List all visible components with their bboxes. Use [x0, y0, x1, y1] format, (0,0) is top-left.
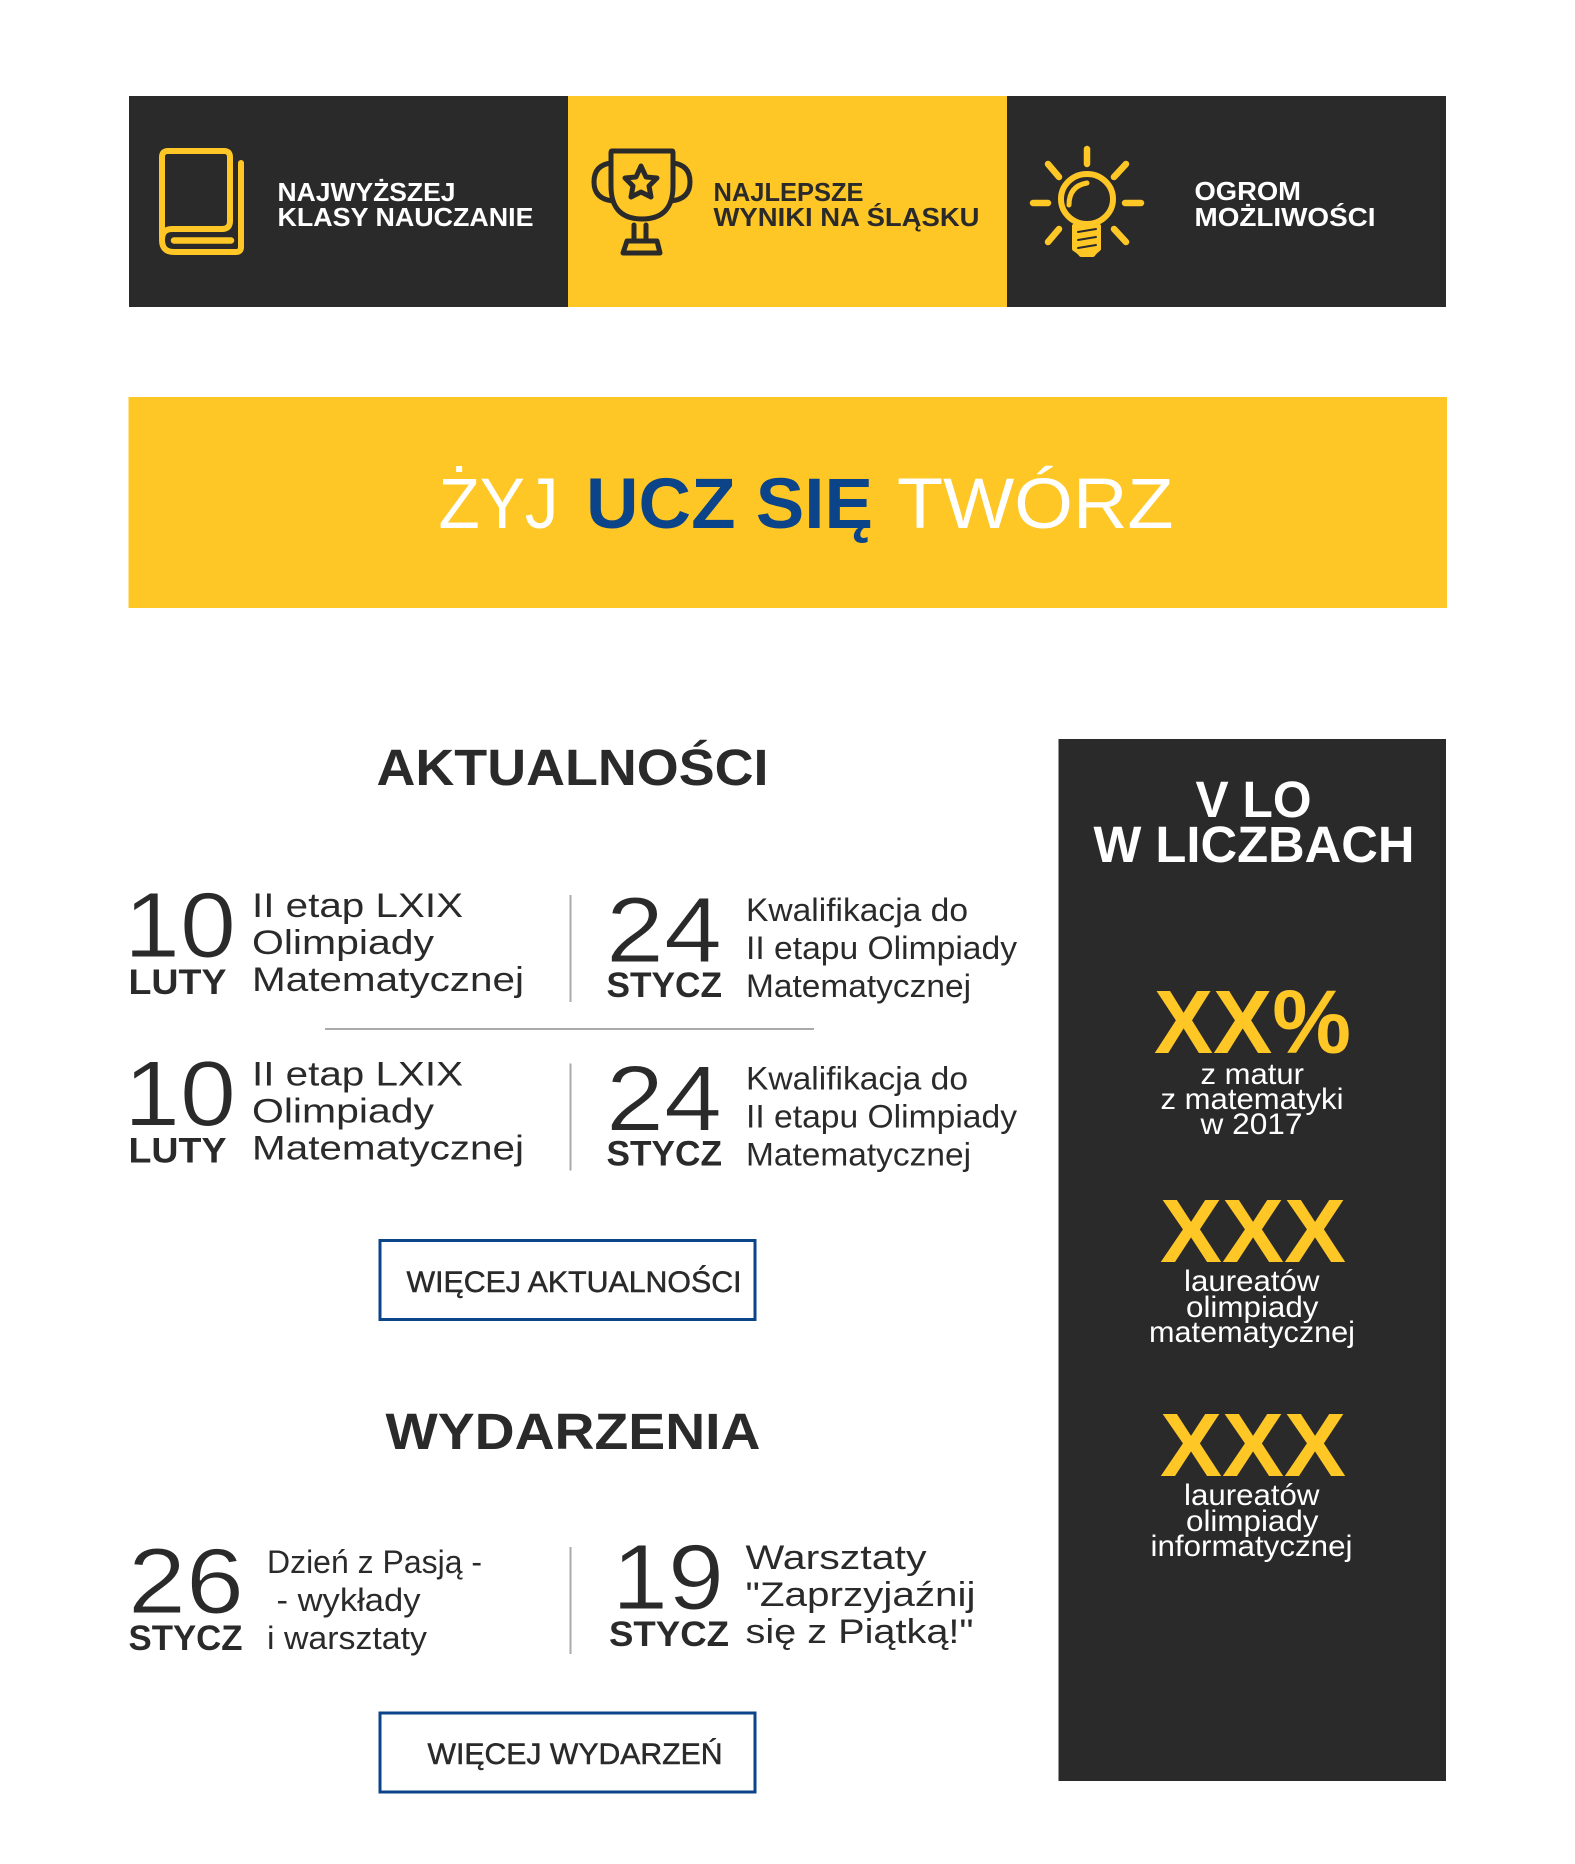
news item: 24 stycz: Kwalifikacja do: [746, 892, 968, 928]
button: więcej wydarzeń: [380, 1713, 755, 1792]
stat: laureaci olimpiady informatycznej: XXX: [1160, 1396, 1346, 1496]
event item: 19 stycz: STYCZ: [609, 1615, 729, 1654]
text: najwyższej klasy nauczanie: KLASY NAUCZANIE: [278, 202, 534, 232]
panel: v lo w liczbach: [1058, 739, 1446, 1781]
news item: 24 stycz, second row: II etapu Olimpiady: [746, 1098, 1017, 1134]
heading: slogan: TWÓRZ: [897, 465, 1174, 544]
icon: book: [162, 151, 241, 252]
news item: 24 stycz: [606, 878, 1017, 1005]
text: najwyższej klasy nauczanie: [278, 177, 534, 232]
news item: 10 luty, second row: 10: [124, 1042, 236, 1146]
heading: slogan: [438, 465, 1174, 544]
news item: 24 stycz, second row: Kwalifikacja do: [746, 1060, 968, 1096]
stat: laureaci olimpiady matematycznej: [1149, 1182, 1355, 1349]
panel: aktualności: [124, 739, 1017, 1320]
event item: 26 stycz: i warsztaty: [267, 1620, 427, 1656]
stat: laureaci olimpiady matematycznej: olimpiady: [1186, 1291, 1318, 1324]
heading: aktualności: AKTUALNOŚCI: [376, 739, 768, 796]
news item: 10 luty: II etap LXIX: [252, 887, 463, 925]
stat: laureaci olimpiady informatycznej: laureatów: [1184, 1479, 1320, 1512]
news item: 10 luty, second row: LUTY: [128, 1132, 226, 1170]
text: najlepsze wyniki na śląsku: NAJLEPSZE: [714, 177, 864, 207]
event item: 19 stycz: Warsztaty: [746, 1539, 926, 1577]
event item: 19 stycz: [609, 1525, 976, 1654]
button: więcej aktualności: [380, 1240, 755, 1320]
heading: slogan: ŻYJ: [438, 465, 558, 544]
news item: 10 luty: [124, 873, 524, 1002]
news item: 10 luty: 10: [124, 873, 236, 977]
news item: 10 luty: Olimpiady: [252, 924, 434, 962]
event item: 26 stycz: [128, 1529, 482, 1658]
stat: laureaci olimpiady matematycznej: matematycznej: [1149, 1316, 1355, 1349]
stat: matury: XX%: [1154, 973, 1351, 1073]
news item: 24 stycz: Matematycznej: [746, 968, 971, 1004]
event item: 26 stycz: 26: [128, 1529, 244, 1633]
panel: top feature bar: [129, 96, 1446, 307]
news item: 24 stycz, second row: 24: [606, 1046, 722, 1150]
news item: 24 stycz: 24: [606, 878, 722, 982]
event item: 26 stycz: - wykłady: [276, 1582, 420, 1618]
text: ogrom możliwości: [1194, 176, 1376, 232]
event item: 19 stycz: się z Piątką!": [746, 1613, 974, 1651]
news item: 10 luty, second row: [124, 1042, 524, 1170]
stat: laureaci olimpiady informatycznej: olimpiady: [1186, 1505, 1318, 1538]
feature: ogrom możliwości: [1007, 96, 1446, 307]
stat: matury: z matur: [1200, 1058, 1304, 1091]
stat: laureaci olimpiady matematycznej: XXX: [1160, 1182, 1346, 1282]
news item: 24 stycz: II etapu Olimpiady: [746, 930, 1017, 966]
button: więcej aktualności: WIĘCEJ AKTUALNOŚCI: [406, 1265, 742, 1299]
text: najlepsze wyniki na śląsku: WYNIKI NA ŚLĄSKU: [714, 202, 980, 232]
icon: light bulb: [1033, 149, 1141, 255]
text: najlepsze wyniki na śląsku: [714, 177, 980, 232]
stat: matury: [1154, 973, 1351, 1141]
text: najwyższej klasy nauczanie: NAJWYŻSZEJ: [278, 177, 456, 207]
icon: trophy: [594, 151, 690, 253]
stat: laureaci olimpiady informatycznej: informatycznej: [1150, 1530, 1352, 1563]
stat: laureaci olimpiady informatycznej: [1150, 1396, 1352, 1563]
news item: 10 luty, second row: Olimpiady: [252, 1092, 434, 1130]
heading: v lo w liczbach: [1094, 771, 1414, 873]
news item: 24 stycz, second row: [606, 1046, 1017, 1174]
panel: slogan banner: [128, 397, 1447, 608]
event item: 26 stycz: Dzień z Pasją -: [267, 1544, 482, 1580]
heading: wydarzenia: WYDARZENIA: [386, 1403, 760, 1460]
event item: 19 stycz: 19: [612, 1525, 724, 1629]
news item: 24 stycz, second row: STYCZ: [606, 1134, 722, 1174]
text: ogrom możliwości: MOŻLIWOŚCI: [1194, 202, 1376, 232]
text: ogrom możliwości: OGROM: [1194, 176, 1301, 206]
news item: 10 luty: LUTY: [128, 963, 226, 1002]
event item: 26 stycz: STYCZ: [128, 1619, 242, 1658]
news item: 10 luty, second row: Matematycznej: [252, 1130, 524, 1168]
heading: slogan: UCZ SIĘ: [586, 465, 873, 544]
news item: 10 luty: Matematycznej: [252, 961, 524, 999]
stat: laureaci olimpiady matematycznej: laureatów: [1184, 1265, 1320, 1298]
heading: v lo w liczbach: W LICZBACH: [1094, 816, 1414, 873]
stat: matury: z matematyki: [1160, 1083, 1344, 1116]
heading: v lo w liczbach: V LO: [1196, 771, 1312, 828]
button: więcej wydarzeń: WIĘCEJ WYDARZEŃ: [428, 1738, 722, 1771]
feature: najwyższej klasy nauczanie: [129, 96, 568, 307]
feature: najlepsze wyniki na śląsku: [568, 96, 1007, 307]
panel: wydarzenia: [128, 1403, 976, 1792]
stat: matury: w 2017: [1199, 1108, 1302, 1141]
news item: 24 stycz: STYCZ: [606, 966, 722, 1005]
event item: 19 stycz: "Zaprzyjaźnij: [746, 1576, 976, 1614]
news item: 10 luty, second row: II etap LXIX: [252, 1056, 463, 1094]
news item: 24 stycz, second row: Matematycznej: [746, 1136, 971, 1172]
